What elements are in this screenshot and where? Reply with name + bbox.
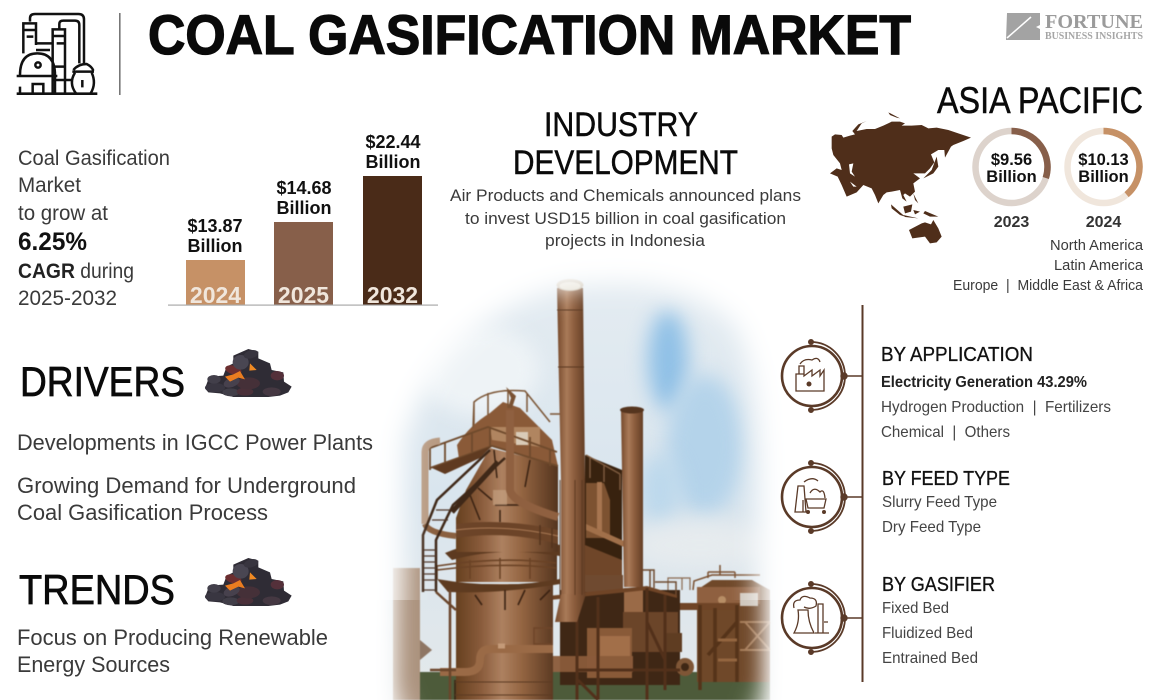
grass xyxy=(420,672,770,700)
map: Asia Pacific xyxy=(830,112,971,243)
text: market growth summary: 6.25% xyxy=(18,228,87,256)
bar chart: market size xyxy=(168,132,438,308)
text: market growth summary: 2025-2032 xyxy=(18,287,117,310)
main stack xyxy=(557,288,585,594)
heading: trends: TRENDS xyxy=(19,566,175,613)
text: other regions: Europe | Middle East & Africa xyxy=(953,277,1144,294)
platform box xyxy=(580,575,623,592)
icon: burning coal pile xyxy=(205,349,292,397)
photo: gasification plant with sky xyxy=(390,278,771,700)
icon: burning coal pile xyxy=(205,558,292,606)
main vessel lower body xyxy=(456,584,553,700)
icon: gasification plant xyxy=(17,14,97,94)
platform and rails xyxy=(430,427,558,470)
donut chart: 2023: 2023 xyxy=(994,214,1029,231)
center framework xyxy=(585,455,622,560)
text: by gasifier xyxy=(882,574,995,667)
text: by feed type: Slurry Feed Type xyxy=(882,494,997,511)
text: drivers list: Growing Demand for Underground xyxy=(17,473,356,498)
text: market growth summary xyxy=(18,147,170,310)
text: by feed type xyxy=(882,468,1010,536)
deck and columns xyxy=(552,585,678,600)
text: industry development detail: projects in Indonesia xyxy=(545,231,706,250)
text: other regions: North America xyxy=(1050,237,1144,254)
text: trends list xyxy=(17,625,328,677)
text: market growth summary: Coal Gasification xyxy=(18,147,170,170)
bar chart: market size: Billion xyxy=(366,152,420,172)
text: industry development detail xyxy=(450,186,801,250)
bar chart: market size: 2025 xyxy=(278,282,329,308)
heading: industry development: INDUSTRY xyxy=(544,106,698,144)
bar chart: market size: 2032 xyxy=(367,282,418,308)
text: by feed type: BY FEED TYPE xyxy=(882,468,1010,490)
text: industry development detail: Air Products and Chemicals announced plans xyxy=(450,186,801,205)
logo: Fortune Business Insights xyxy=(1006,11,1143,42)
text: by application: Electricity Generation 43.29% xyxy=(881,374,1087,391)
left tank xyxy=(393,568,420,700)
donut chart: 2024: Billion xyxy=(1078,168,1129,186)
right tower xyxy=(697,580,770,682)
text: by gasifier: Entrained Bed xyxy=(882,650,978,667)
text: other regions xyxy=(953,237,1144,294)
text: industry development detail: to invest USD15 billion in coal gasification xyxy=(465,209,786,228)
heading: industry development xyxy=(513,106,738,182)
logo: Fortune Business Insights: BUSINESS INSIGHTS xyxy=(1045,31,1143,42)
timeline: segmentation spine xyxy=(862,305,864,682)
bar chart: market size: $22.44 xyxy=(365,132,421,152)
text: by feed type: Dry Feed Type xyxy=(882,519,981,536)
text: market growth summary: to grow at xyxy=(18,202,108,225)
donut chart: 2023: Billion xyxy=(986,168,1037,186)
text: by application: Chemical | Others xyxy=(881,424,1010,441)
text: drivers list xyxy=(17,430,373,525)
main vessel upper body xyxy=(456,448,558,552)
pipes xyxy=(425,441,440,524)
heading: industry development: DEVELOPMENT xyxy=(513,144,738,182)
bar chart: market size: Billion xyxy=(188,236,242,256)
icon: by application factory xyxy=(782,340,862,412)
text: by application: Hydrogen Production | Fertilizers xyxy=(881,399,1111,416)
donut chart: 2023: $9.56 xyxy=(991,151,1032,169)
text: by gasifier: BY GASIFIER xyxy=(882,574,995,596)
bar chart: market size: 2024 xyxy=(190,282,241,308)
text: market growth summary: CAGR during xyxy=(18,260,134,283)
divider: header xyxy=(119,13,121,95)
text: other regions: Latin America xyxy=(1054,257,1144,274)
donut chart: 2024: $10.13 xyxy=(1078,151,1129,169)
donut chart: 2023 xyxy=(976,131,1048,231)
text: trends list: Energy Sources xyxy=(17,652,170,677)
dome xyxy=(457,402,558,466)
text: drivers list: Developments in IGCC Power Plants xyxy=(17,430,373,455)
text: by application: BY APPLICATION xyxy=(881,344,1033,366)
spiral stairs xyxy=(423,450,505,592)
title: COAL GASIFICATION MARKET xyxy=(148,3,911,66)
second stack xyxy=(621,411,643,587)
donut chart: 2024 xyxy=(1068,131,1140,231)
icon: by gasifier cooling tower xyxy=(782,582,862,654)
bar chart: market size: $14.68 xyxy=(276,178,332,198)
logo: Fortune Business Insights: FORTUNE xyxy=(1045,11,1143,33)
text: by application xyxy=(881,344,1111,441)
text: market growth summary: Market xyxy=(18,174,81,197)
text: drivers list: Coal Gasification Process xyxy=(17,500,268,525)
bar chart: market size: $13.87 xyxy=(187,216,243,236)
text: by gasifier: Fixed Bed xyxy=(882,600,949,617)
icon: by feed type coal cart xyxy=(782,460,862,534)
heading: drivers: DRIVERS xyxy=(20,358,185,405)
bar chart: market size: Billion xyxy=(276,198,332,218)
text: trends list: Focus on Producing Renewable xyxy=(17,625,328,650)
donut chart: 2024: 2024 xyxy=(1086,214,1121,231)
text: by gasifier: Fluidized Bed xyxy=(882,625,973,642)
